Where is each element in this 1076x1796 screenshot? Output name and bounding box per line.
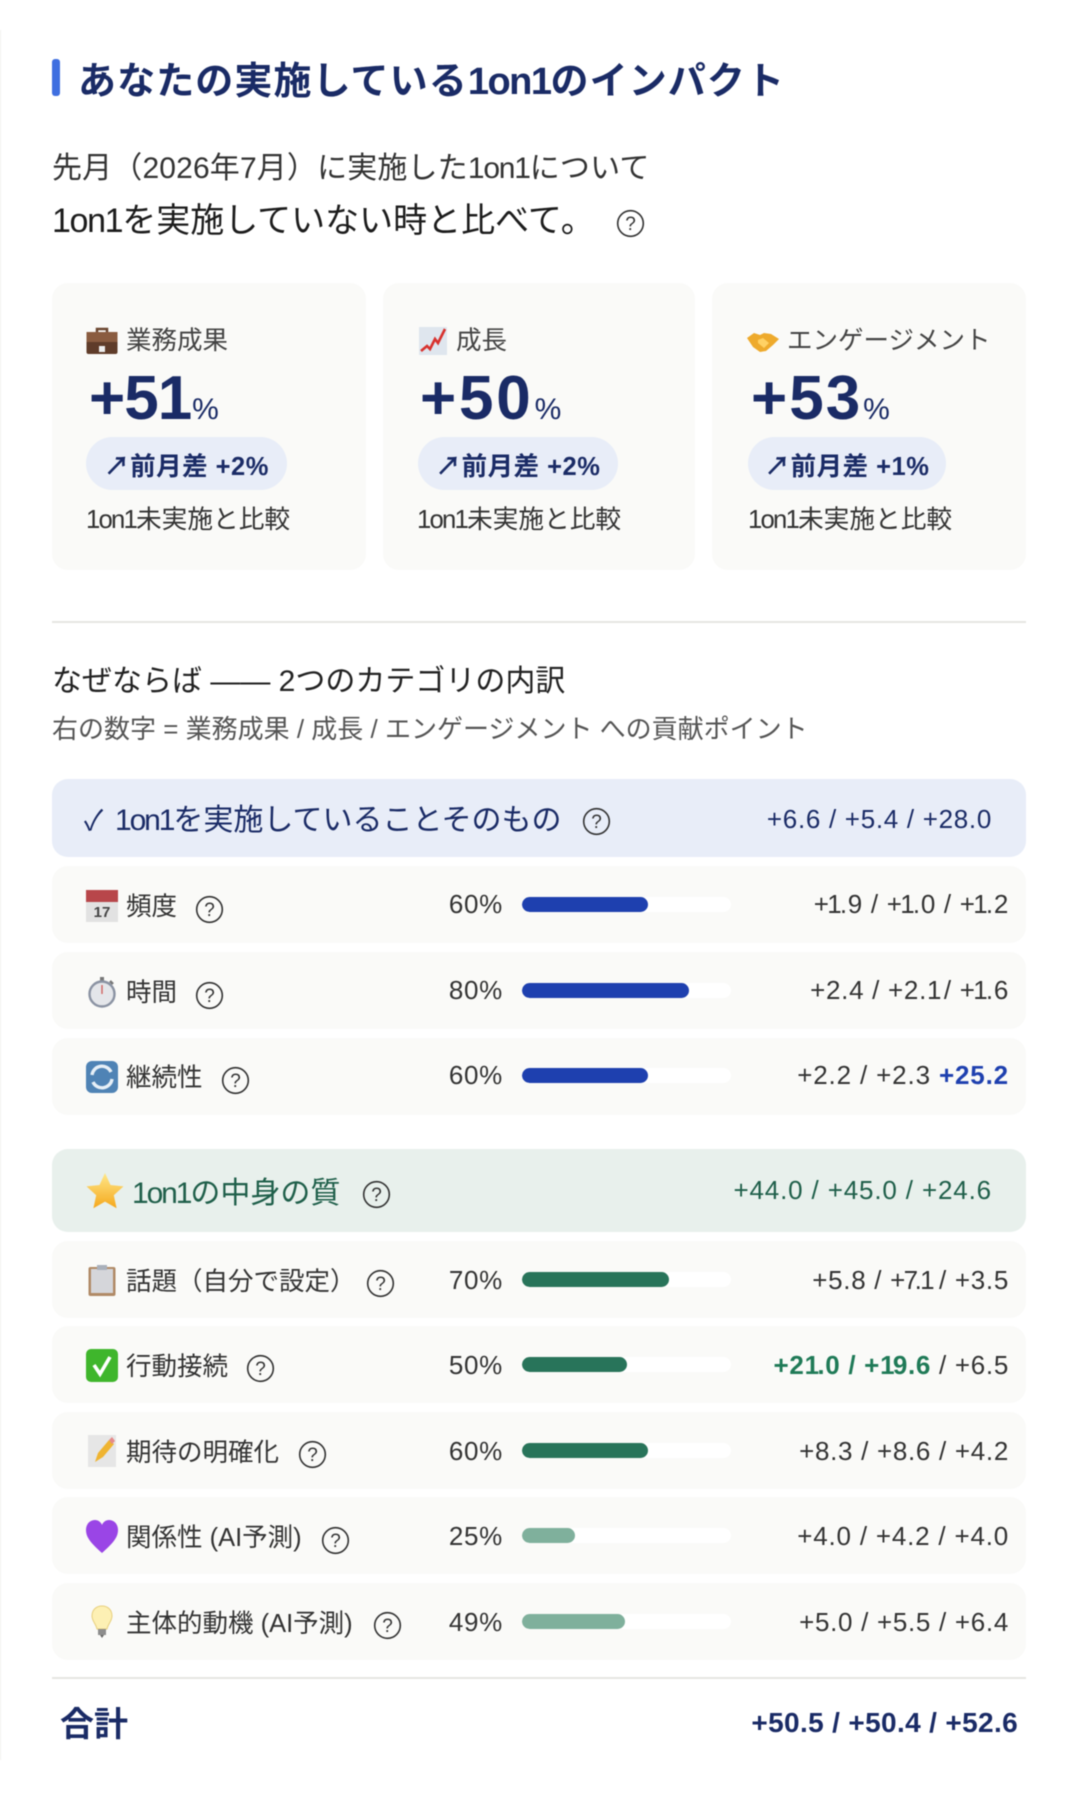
row: 行動接続	[52, 1326, 1026, 1403]
percent: 60%	[449, 1060, 503, 1090]
icon: help: ?	[204, 986, 215, 1007]
icon: help	[195, 981, 224, 1010]
label: 期待の明確化	[126, 1439, 279, 1467]
icon: help: ?	[330, 1531, 341, 1552]
title: あなたの実施している1on1のインパクト	[78, 61, 785, 103]
icon: help	[366, 1269, 395, 1298]
icon: help: ?	[625, 214, 636, 235]
icon: help: ?	[382, 1616, 393, 1637]
value: +53%	[751, 364, 890, 433]
icon: handshake	[746, 332, 780, 353]
bar 60%	[522, 1443, 731, 1458]
section heading: なぜならば —— 2つのカテゴリの内訳	[52, 665, 565, 698]
percent: 49%	[449, 1607, 503, 1637]
icon: help: ?	[371, 1185, 382, 1206]
icon: help	[195, 895, 224, 924]
icon: help: ?	[204, 900, 215, 921]
points: +5.0 / +5.5 / +6.4	[799, 1607, 1009, 1637]
percent: 50%	[449, 1350, 503, 1380]
value: +51%	[89, 364, 219, 433]
intro line 2: 1on1を実施していない時と比べて。	[52, 202, 595, 240]
panel: 業務成果 card	[52, 283, 366, 570]
icon: chart	[418, 326, 448, 356]
icon: light bulb	[90, 1604, 114, 1638]
icon: clipboard	[88, 1264, 116, 1297]
bar 70%	[522, 1272, 731, 1287]
label: 話題（自分で設定）	[126, 1268, 356, 1296]
icon: briefcase	[86, 327, 118, 355]
percent: 60%	[449, 889, 503, 919]
icon: help	[321, 1526, 350, 1555]
bar 80%	[522, 983, 731, 998]
left page edge	[0, 30, 1, 1760]
row: 頻度	[52, 866, 1026, 943]
label: 成長	[456, 327, 507, 355]
category points: +44.0 / +45.0 / +24.6	[733, 1175, 992, 1205]
icon: help	[362, 1180, 391, 1209]
icon: purple heart	[85, 1519, 119, 1554]
panel: エンゲージメント card	[712, 283, 1026, 570]
icon: help: ?	[591, 812, 602, 833]
label: 継続性	[126, 1064, 203, 1092]
row: 期待の明確化	[52, 1412, 1026, 1489]
pill: month difference: ↗前月差 +2%	[436, 453, 600, 481]
icon: memo	[88, 1435, 116, 1467]
total points: +50.5 / +50.4 / +52.6	[751, 1707, 1018, 1738]
panel: category header 1on1の中身の質	[52, 1149, 1026, 1232]
title accent bar	[52, 59, 60, 96]
intro line 1: 先月（2026年7月）に実施した1on1について	[52, 152, 649, 185]
label: 関係性 (AI予測)	[126, 1524, 302, 1552]
icon: help: ?	[375, 1274, 386, 1295]
category points: +6.6 / +5.4 / +28.0	[767, 804, 992, 834]
panel: 成長 card	[383, 283, 695, 570]
icon: check	[85, 1348, 119, 1383]
points: +5.8 / +7.1 / +3.5	[812, 1265, 1009, 1295]
label: 時間	[126, 979, 177, 1007]
icon: help: ?	[255, 1359, 266, 1380]
panel: category header 1on1を実施していることそのもの	[52, 779, 1026, 857]
icon: help: ?	[307, 1445, 318, 1466]
icon: help	[373, 1611, 402, 1640]
comparison note: 1on1未実施と比較	[417, 506, 621, 534]
row: 時間	[52, 952, 1026, 1029]
points: +2.2 / +2.3 +25.2	[797, 1060, 1009, 1090]
bar 50%	[522, 1357, 731, 1372]
icon: help	[298, 1440, 327, 1469]
icon: stopwatch	[88, 976, 116, 1008]
check mark: ✓	[84, 805, 103, 836]
pill: month difference	[748, 437, 946, 490]
icon: calendar: 17	[94, 904, 110, 921]
row: 話題	[52, 1241, 1026, 1318]
label: 業務成果	[126, 327, 228, 355]
pill: month difference: ↗前月差 +1%	[765, 453, 929, 481]
bar 60%	[522, 897, 731, 912]
percent: 25%	[449, 1521, 503, 1551]
percent: 60%	[449, 1436, 503, 1466]
comparison note: 1on1未実施と比較	[748, 506, 952, 534]
label: エンゲージメント	[787, 327, 990, 355]
bar 60%	[522, 1068, 731, 1083]
bar 25%	[522, 1528, 731, 1543]
icon: help	[616, 209, 645, 238]
icon: refresh	[85, 1060, 119, 1094]
pill: month difference	[86, 437, 287, 490]
points: +21.0 / +19.6 / +6.5	[774, 1350, 1009, 1380]
icon: help	[221, 1066, 250, 1095]
row: 継続性	[52, 1038, 1026, 1115]
label: 行動接続	[126, 1353, 228, 1381]
points: +4.0 / +4.2 / +4.0	[797, 1521, 1009, 1551]
pill: month difference	[418, 437, 618, 490]
section note: 右の数字 = 業務成果 / 成長 / エンゲージメント への貢献ポイント	[52, 714, 808, 744]
pill: month difference: ↗前月差 +2%	[104, 453, 269, 481]
total label: 合計	[60, 1706, 128, 1744]
icon: help: ?	[230, 1071, 241, 1092]
label: 頻度	[126, 893, 177, 921]
value: +50%	[420, 364, 561, 433]
points: +2.4 / +2.1 / +1.6	[810, 975, 1009, 1005]
category name: 1on1を実施していることそのもの	[115, 804, 562, 837]
icon: help	[582, 807, 611, 836]
comparison note: 1on1未実施と比較	[86, 506, 290, 534]
bar 49%	[522, 1614, 731, 1629]
icon: star	[86, 1173, 124, 1209]
points: +8.3 / +8.6 / +4.2	[799, 1436, 1009, 1466]
points: +1.9 / +1.0 / +1.2	[814, 889, 1009, 919]
icon: calendar	[85, 889, 119, 922]
label: 主体的動機 (AI予測)	[126, 1610, 353, 1638]
row: 主体的動機	[52, 1583, 1026, 1660]
percent: 80%	[449, 975, 503, 1005]
icon: help	[246, 1354, 275, 1383]
category name: 1on1の中身の質	[132, 1177, 340, 1210]
percent: 70%	[449, 1265, 503, 1295]
row: 関係性	[52, 1497, 1026, 1574]
